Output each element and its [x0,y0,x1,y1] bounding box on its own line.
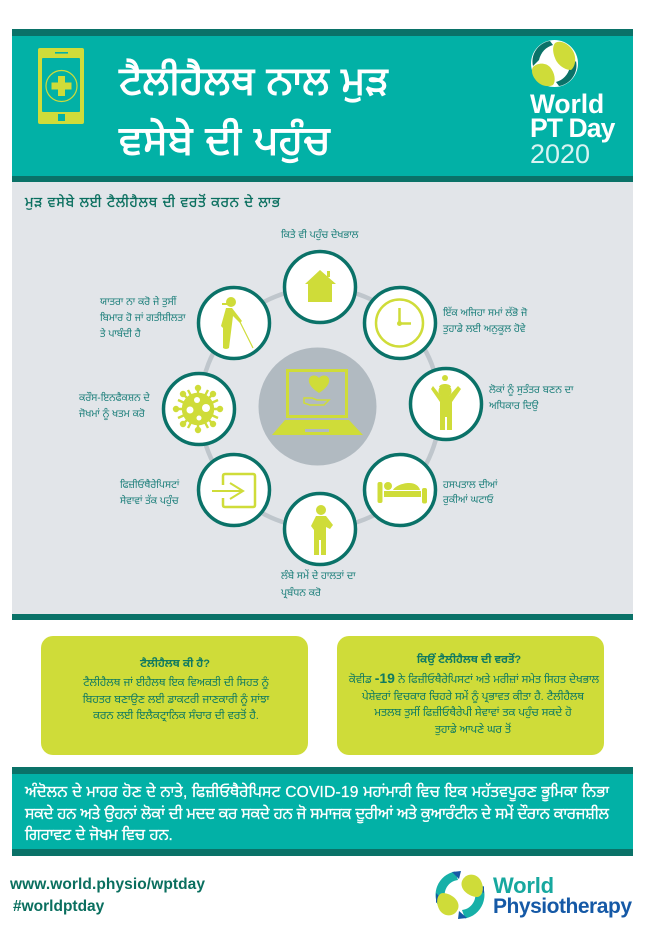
website and hashtag: www.world.physio/wptday [9,876,205,893]
card: what is telehealth: ਕਰਨ ਲਈ ਇਲੈਕਟ੍ਰਾਨਿਕ ਸੰਚਾਰ ਦੀ ਵਰਤੋਂ ਹੈ. [92,709,259,723]
website and hashtag: #worldptday [13,898,105,915]
panel: benefits [12,182,633,620]
benefit: clock [364,288,528,358]
title [118,59,389,164]
benefit: access to services: ਸੇਵਾਵਾਂ ਤੱਕ ਪਹੁੰਚ [119,495,179,507]
subheading: ਮੁੜ ਵਸੇਬੇ ਲਈ ਟੈਲੀਹੈਲਥ ਦੀ ਵਰਤੋਂ ਕਰਨ ਦੇ ਲਾਭ [24,193,281,211]
benefit: virus: ਜੋਖਮਾਂ ਨੂੰ ਖਤਮ ਕਰੋ [78,407,145,420]
card: what is telehealth: ਟੈਲੀਹੈਲਥ ਕੀ ਹੈ? [139,656,210,670]
card: what is telehealth: ਟੈਲੀਹੈਲਥ ਜਾਂ ਈਹੈਲਥ ਇਕ ਵਿਅਕਤੀ ਦੀ ਸਿਹਤ ਨੂੰ [82,676,270,689]
benefit: home [280,229,359,322]
World PT Day 2020 logo: 2020 [530,139,590,169]
benefit: avoid travel: ਤੇ ਪਾਬੰਦੀ ਹੈ [99,328,141,340]
World PT Day 2020 logo: PT Day [530,113,616,143]
card: why telehealth: ਮਤਲਬ ਤੁਸੀਂ ਫਿਜ਼ੀਓਥੈਰੇਪੀ ਸੇਵਾਵਾਂ ਤਕ ਪਹੁੰਚ ਸਕਦੇ ਹੋ [373,705,572,719]
card: why telehealth: ਕਿਉਂ ਟੈਲੀਹੈਲਥ ਦੀ ਵਰਤੋਂ? [416,652,521,666]
benefit: access to services [119,454,270,526]
benefit: avoid travel: ਬਿਮਾਰ ਹੋ ਜਾਂ ਗਤੀਸ਼ੀਲਤਾ [99,311,186,324]
benefit: avoid travel [99,288,270,358]
World Physiotherapy logo: World [493,873,554,898]
statement band: ਸਕਦੇ ਹਨ ਅਤੇ ਉਹਨਾਂ ਲੋਕਾਂ ਦੀ ਮਦਦ ਕਰ ਸਕਦੇ ਹਨ ਜੋ ਸਮਾਜਕ ਦੂਰੀਆਂ ਅਤੇ ਕੁਆਰੰਟੀਨ ਦੇ ਸਮੇਂ ਦੌਰਾਨ ਕਾਰਜਸ਼ੀਲ [24,804,609,824]
website and hashtag [9,876,205,915]
World PT Day 2020 logo: World [530,89,604,119]
card: why telehealth: ਤੁਹਾਡੇ ਆਪਣੇ ਘਰ ਤੋਂ [434,723,512,736]
benefit: independence: ਲੋਕਾਂ ਨੂੰ ਸੁਤੰਤਰ ਬਣਨ ਦਾ [488,383,574,396]
benefit: avoid travel: ਯਾਤਰਾ ਨਾ ਕਰੋ ਜੇ ਤੁਸੀਂ [99,295,177,308]
benefit: home: ਕਿਤੇ ਵੀ ਪਹੁੰਚ ਦੇਖਭਾਲ [280,229,359,241]
title: ਵਸੇਬੇ ਦੀ ਪਹੁੰਚ [118,117,331,164]
benefit: hospital bed: ਹਸਪਤਾਲ ਦੀਆਂ [442,479,499,491]
World Physiotherapy logo [436,871,632,919]
benefit: long-term conditions: ਪ੍ਰਬੰਧਨ ਕਰੋ [280,586,321,599]
benefit: clock: ਇੱਕ ਅਜਿਹਾ ਸਮਾਂ ਲੱਭੋ ਜੋ [442,306,528,319]
World PT Day 2020 logo [530,40,616,169]
World Physiotherapy logo: Physiotherapy [493,895,632,918]
card: why telehealth: ਕੋਵੀਡ -19 ਨੇ ਫਿਜ਼ੀਓਥੈਰੇਪਿਸਟਾਂ ਅਤੇ ਮਰੀਜ਼ਾਂ ਸਮੇਤ ਸਿਹਤ ਦੇਖਭਾਲ [348,670,600,686]
statement band [12,767,633,856]
card: why telehealth: ਪੇਸ਼ੇਵਰਾਂ ਵਿਚਕਾਰ ਚਿਹਰੇ ਸਮੇਂ ਨੂੰ ਪ੍ਰਭਾਵਤ ਕੀਤਾ ਹੈ. ਟੈਲੀਹੈਲਥ [361,690,584,703]
benefit: virus [78,374,234,444]
icon: smartphone with medical cross [38,48,84,124]
benefit: access to services: ਫਿਜ਼ੀਓਥੈਰੇਪਿਸਟਾਂ [119,479,180,491]
statement band: ਅੰਦੋਲਨ ਦੇ ਮਾਹਰ ਹੋਣ ਦੇ ਨਾਤੇ, ਫਿਜ਼ੀਓਥੈਰੇਪਿਸਟ COVID-19 ਮਹਾਂਮਾਰੀ ਵਿਚ ਇਕ ਮਹੱਤਵਪੂਰਣ ਭੂਮਿਕਾ ਨਿਭਾ [24,782,609,802]
card: what is telehealth: ਬਿਹਤਰ ਬਣਾਉਣ ਲਈ ਡਾਕਟਰੀ ਜਾਣਕਾਰੀ ਨੂੰ ਸਾਂਝਾ [82,693,270,706]
benefit: independence: ਅਧਿਕਾਰ ਦਿਉ [488,400,539,412]
icon: laptop with heart and hand [258,348,376,466]
benefit: hospital bed: ਰੁਕੀਆਂ ਘਟਾਓ [442,494,494,506]
benefit: virus: ਕਰੌਸ-ਇਨਫੈਕਸ਼ਨ ਦੇ [78,391,150,404]
title: ਟੈਲੀਹੈਲਥ ਨਾਲ ਮੁੜ [118,59,389,104]
card: what is telehealth [41,636,308,755]
benefit: clock: ਤੁਹਾਡੇ ਲਈ ਅਨੁਕੂਲ ਹੋਵੇ [442,322,526,335]
benefit: long-term conditions: ਲੰਬੇ ਸਮੇਂ ਦੇ ਹਾਲਤਾਂ ਦਾ [280,570,356,582]
card: why telehealth [337,636,604,755]
header band [12,29,633,182]
diagram ring [200,288,440,528]
statement band: ਗਿਰਾਵਟ ਦੇ ਜੋਖਮ ਵਿਚ ਹਨ. [24,825,173,844]
benefit: independence [410,368,574,440]
benefit: hospital bed [364,454,499,526]
benefit: long-term conditions [280,494,356,599]
